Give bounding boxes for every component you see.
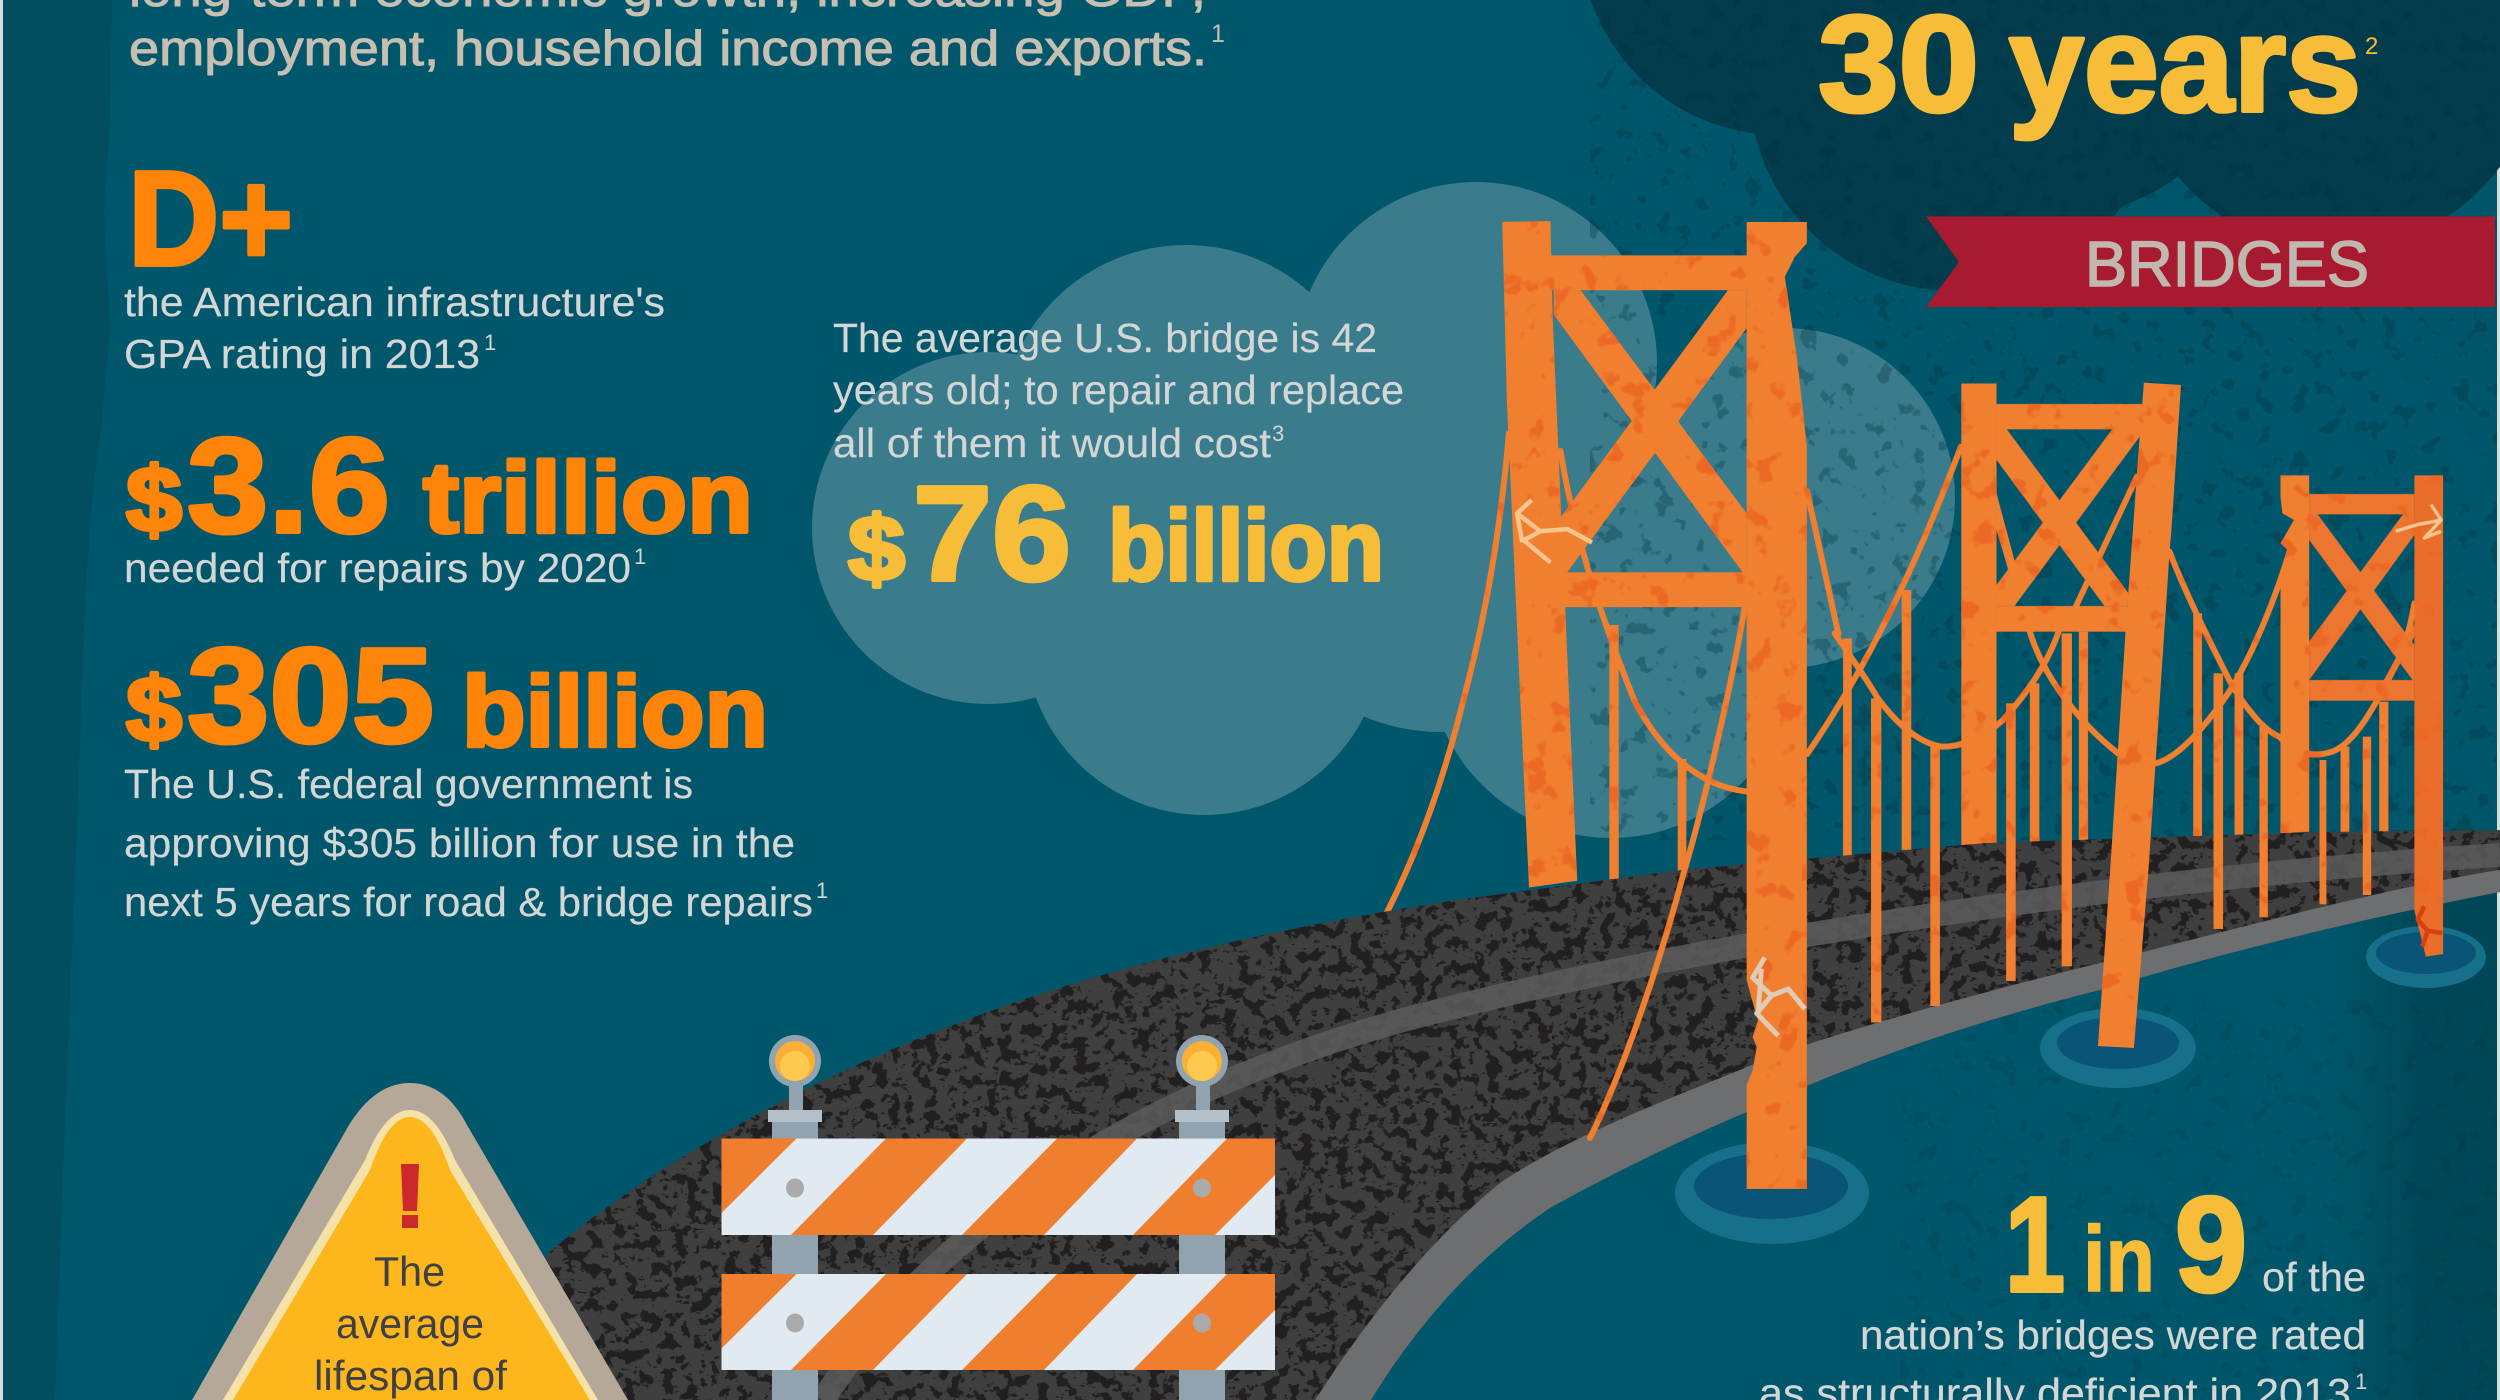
stat: 305 billion: $: [126, 659, 182, 761]
stat: 1 in 9: 9: [2175, 1169, 2247, 1320]
banner: bridges: BRIDGES: [2085, 228, 2369, 300]
rear hangers: [1902, 590, 2388, 850]
bridge piers in water: [1675, 926, 2486, 1244]
stat: 76 billion: 3: [1272, 421, 1284, 446]
stat: D+ grade: GPA rating in 2013: [124, 331, 480, 377]
dark storm cloud: [1580, 0, 2500, 291]
hangers: front: [1871, 633, 2371, 1022]
tower 1 hangers and cables: [1380, 433, 1852, 926]
tower 1 right post: [1747, 222, 1807, 1189]
sign text: lifespan of: [314, 1352, 507, 1399]
stat: 1 in 9: 1: [2005, 1169, 2065, 1320]
stat: D+ grade: the American infrastructure's: [124, 279, 665, 325]
stat: 1 in 9: in: [2083, 1207, 2155, 1311]
tower 2 frame: [1961, 383, 2144, 847]
upper board: [722, 1138, 1275, 1235]
grunge texture upper right: [1590, 0, 2497, 1400]
stat: 3.6 trillion: [124, 410, 753, 591]
stat: 76 billion: billion: [1108, 490, 1384, 602]
bridge towers and cables behind road: [1380, 221, 2414, 926]
stat: 305 billion: next 5 years for road & bridge repairs: [124, 879, 813, 925]
stat: 305 billion: [124, 620, 828, 925]
stat: 3.6 trillion: 1: [634, 544, 646, 569]
tower 2 right leg: [2098, 383, 2181, 1048]
sign text: [314, 1248, 507, 1399]
stat: 76 billion: 76: [913, 458, 1071, 609]
stat: 76 billion: years old; to repair and replace: [833, 367, 1404, 413]
stat: 1 in 9: nation’s bridges were rated: [1860, 1312, 2366, 1358]
intro text: 1: [1211, 20, 1225, 48]
posts: [772, 1085, 1225, 1400]
light cloud: [812, 182, 1955, 838]
stat: 1 in 9: of the: [2262, 1254, 2366, 1300]
stat: 76 billion: all of them it would cost: [833, 420, 1272, 466]
road lane stripe: [823, 855, 2500, 1400]
road barricade: [722, 1035, 1275, 1400]
stat: D+ grade: D+: [128, 143, 293, 294]
stat: 305 billion: The U.S. federal government is: [124, 761, 693, 807]
cracks in bridge: [1517, 500, 2442, 1036]
intro text: employment, household income and exports.: [129, 22, 1207, 76]
stat: 76 billion: [833, 315, 1404, 609]
stat: 76 billion: The average U.S. bridge is 42: [833, 315, 1377, 361]
bridge front legs and hangers: [1590, 222, 2443, 1189]
lower board: [722, 1274, 1275, 1370]
sign text: average: [336, 1300, 484, 1347]
front cable: [1590, 607, 1745, 1138]
stat: 30 years: 2: [2365, 33, 2378, 60]
intro text: [129, 0, 1225, 76]
tower 3 frame: [2280, 475, 2414, 833]
tower 3 right post: [2414, 475, 2443, 957]
warning triangle sign: [192, 1083, 628, 1400]
tower 1 frame: [1502, 221, 1748, 888]
stat: 305 billion: 305: [187, 620, 434, 771]
main cables: [1807, 447, 2414, 763]
sign text: The: [374, 1248, 445, 1295]
stat: 305 billion: 1: [816, 878, 828, 903]
stat: 3.6 trillion: $: [126, 449, 182, 551]
warning lamps: [769, 1035, 1228, 1087]
stat: 3.6 trillion: trillion: [423, 442, 753, 554]
banner: bridges: [1926, 216, 2495, 307]
stat: 76 billion: $: [848, 498, 905, 600]
stat: 3.6 trillion: 3.6: [187, 410, 390, 561]
stat: 1 in 9: 1: [2355, 1369, 2367, 1394]
road: [450, 820, 2500, 1400]
stat: 305 billion: billion: [462, 656, 768, 768]
post caps: [768, 1110, 1229, 1122]
stat: 305 billion: approving $305 billion for use in the: [124, 820, 795, 866]
road curb: [1315, 870, 2500, 1400]
exclamation mark: [401, 1164, 419, 1228]
stat: 3.6 trillion: needed for repairs by 2020: [124, 545, 631, 591]
stat: 30 years: [1818, 0, 2378, 141]
stat: D+ grade: 1: [484, 330, 496, 355]
stat: D+ grade: [124, 143, 665, 377]
stat: 1 in 9: [1759, 1169, 2367, 1400]
